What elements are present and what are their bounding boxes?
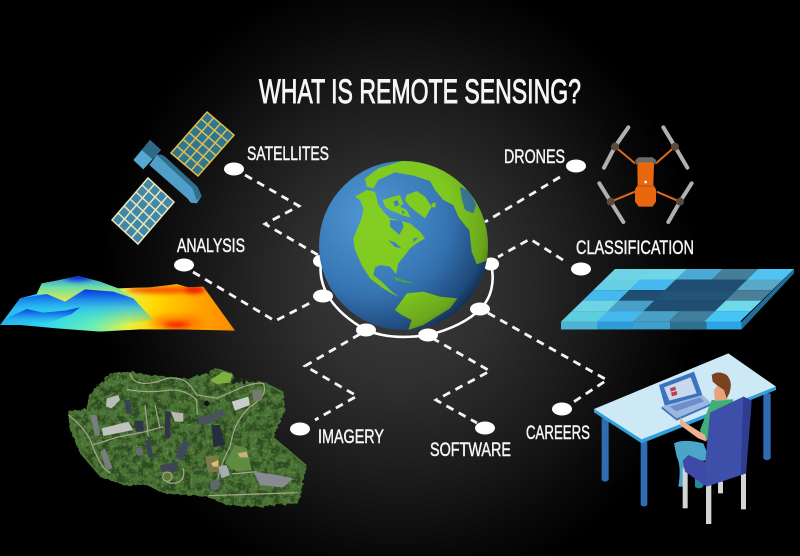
title: WHAT IS REMOTE SENSING? [259,73,581,111]
laptop [659,372,711,421]
ring nodes [313,255,499,342]
desk top [594,353,776,440]
leaf highlights [71,370,303,505]
dashed connectors [193,175,607,423]
desk legs [602,393,771,507]
chair legs [683,468,746,524]
person legs [674,441,710,487]
rear ridge [37,276,133,302]
icon: satellite [112,112,234,244]
ring around globe [321,262,493,337]
icon: drone [599,127,692,222]
blue front ridge [6,307,80,323]
campus aerial map [68,368,307,507]
propellers [599,127,692,222]
label: careers: CAREERS [526,423,590,444]
label: software: SOFTWARE [430,440,511,461]
vegetation [68,368,307,507]
tree texture [71,370,303,505]
icon: terrain map [0,276,235,332]
chair seat [683,455,710,487]
roads [68,373,298,496]
lower solar panel [112,178,174,244]
label: drones: DRONES [504,147,565,168]
red peaks [127,287,200,293]
buildings [90,389,293,490]
icon: classification grid [561,269,794,329]
label nodes [174,160,591,436]
label: satellites: SATELLITES [247,144,329,165]
head and hair [714,380,729,401]
satellite body [133,140,202,203]
drone body [635,157,656,207]
label: classification: CLASSIFICATION [576,238,694,259]
blue middle ridge [0,289,153,327]
arms [611,147,680,202]
arm [680,417,707,442]
satellite cube [133,140,161,169]
upper solar panel [171,112,234,176]
label: analysis: ANALYSIS [177,236,245,257]
icon: person at desk [594,353,776,524]
lawn [210,372,233,384]
chair back [705,397,752,487]
person torso [700,399,733,440]
globe [319,158,495,330]
label: imagery: IMAGERY [318,427,384,448]
motors [607,143,684,206]
